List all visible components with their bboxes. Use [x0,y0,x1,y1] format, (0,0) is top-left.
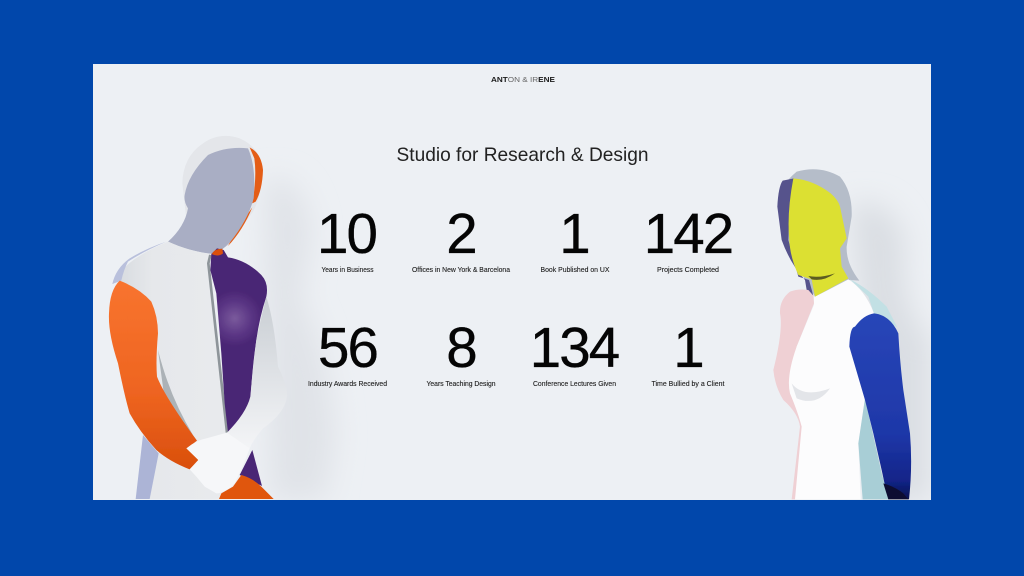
stat: 8 years teaching [426,316,496,388]
stat: 56 awards: 56 [318,316,377,379]
hood grey [788,169,859,296]
white torso [789,279,874,499]
hood [182,136,263,248]
orange hand cuff [219,475,274,499]
purple lower panel [240,450,262,486]
stat: 142 projects: 142 [644,202,732,265]
teal lower back [858,398,889,499]
logo: ANTON & IR ENE [491,75,555,84]
stat: 2 offices: 2 [446,202,476,265]
stat: 56 awards [308,316,387,388]
clasped white hands [186,433,250,493]
orange arm [109,281,198,469]
torso white [112,242,246,499]
blue arm [849,313,911,499]
torso shading [792,383,830,401]
stat: 8 years teaching: 8 [446,316,476,379]
indigo face side [777,178,813,296]
figure: left person in colour-block suit [109,136,287,499]
dark hand at wrist [883,483,908,499]
far arm white [227,296,278,433]
stat: 1 time bullied [652,316,724,388]
hood orange side [228,147,263,246]
shadow behind right figure [850,203,931,500]
stat: 10 years in business: Years in Business [322,265,374,274]
stat: 10 years in business: 10 [317,202,376,265]
torso shading [158,350,193,435]
shadow behind left figure [270,192,329,495]
stat: 56 awards: Industry Awards Received [308,379,387,388]
stat: 1 book [540,202,610,274]
centre seam [208,255,227,433]
stat: 134 lectures: 134 [530,316,619,379]
purple panel [210,248,267,433]
panel: light studio backdrop [93,64,931,500]
stat: 8 years teaching: Years Teaching Design [426,379,496,388]
stat: 1 book: Book Published on UX [540,265,610,274]
stat: 2 offices [412,202,511,274]
stat: 2 offices: Offices in New York & Barcelona [412,265,511,274]
figure: right person in colour-block suit [773,169,911,499]
stat: 134 lectures: Conference Lectures Given [533,379,616,388]
stat: 1 time bullied: Time Bullied by a Client [652,379,724,388]
teal shoulder [850,279,897,327]
stat: 142 projects: Projects Completed [657,265,719,274]
pink front panel [773,289,814,499]
stat: 1 time bullied: 1 [673,316,703,379]
orange collar [212,249,223,256]
face panel grey [168,148,254,254]
title: Studio for Research & Design [396,144,648,166]
chin shadow [808,273,835,280]
stat: 1 book: 1 [559,202,589,265]
yellow face [789,178,848,297]
shoulder stripe periwinkle [112,242,166,284]
lower stripe periwinkle [136,435,159,499]
